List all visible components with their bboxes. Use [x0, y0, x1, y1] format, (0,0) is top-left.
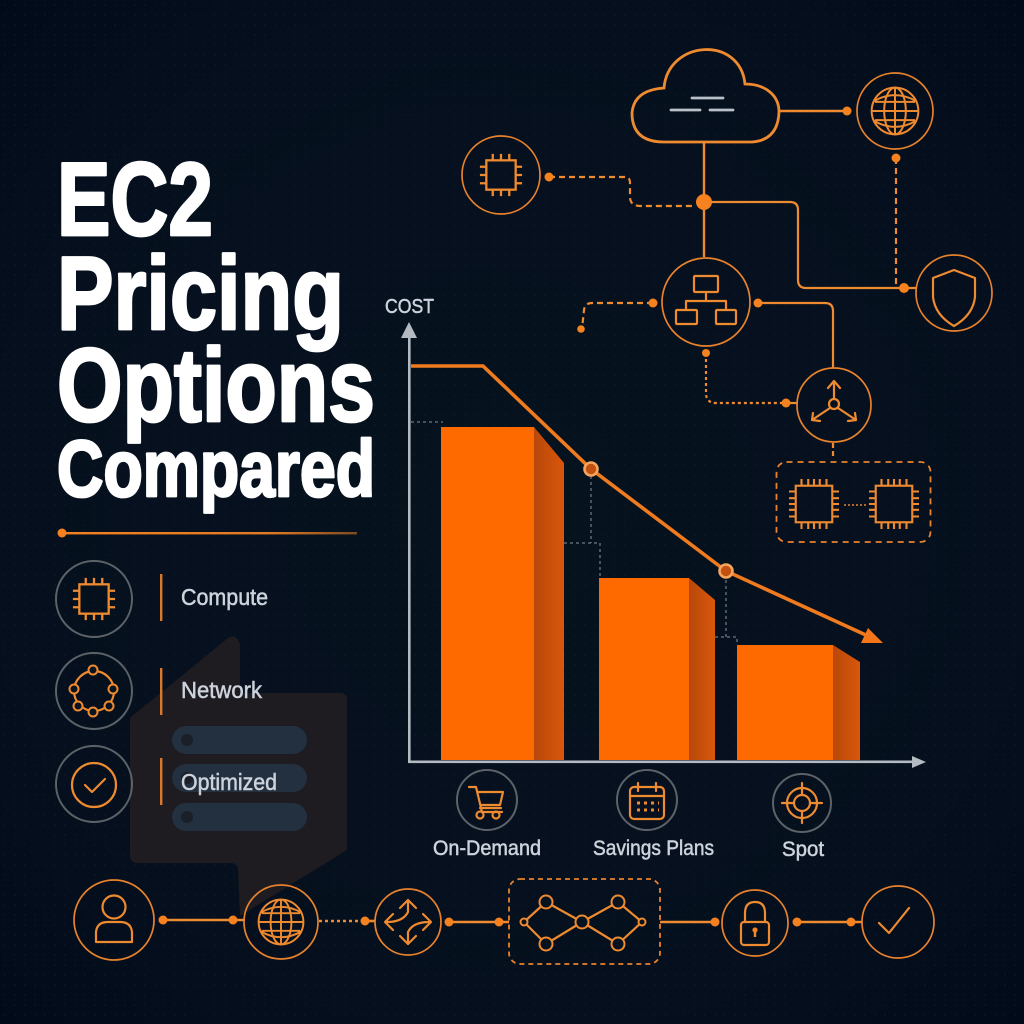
- title: [57, 142, 375, 513]
- title divider: [58, 528, 357, 538]
- pricing option: on-demand: [433, 770, 541, 860]
- pricing option: savings plans: Savings Plans: [593, 837, 714, 860]
- connectors: [549, 111, 916, 459]
- chart axes: [401, 322, 926, 768]
- legend: compute: [56, 561, 268, 637]
- icon: cloud: [632, 50, 779, 142]
- pricing option: savings plans: [593, 770, 714, 860]
- bar: on-demand: [441, 427, 564, 760]
- guide lines: [411, 422, 737, 645]
- bar: spot: [737, 645, 860, 760]
- flow connectors: [163, 920, 862, 922]
- icon: flow globe: [244, 885, 318, 959]
- title: EC2: [57, 142, 213, 258]
- dashed network group: [509, 879, 660, 964]
- background translucent document shape: [130, 636, 347, 916]
- legend: optimized: [56, 746, 277, 822]
- icon: distribute arrows: [797, 368, 871, 442]
- icon: lock: [722, 890, 788, 956]
- legend: compute: Compute: [181, 584, 268, 610]
- legend: network: [56, 653, 262, 729]
- connector nodes: [544, 106, 909, 408]
- cost trend line: [411, 366, 883, 643]
- pricing option: on-demand: On-Demand: [433, 837, 541, 860]
- bar: savings plans: [599, 578, 715, 760]
- title: Options: [57, 328, 375, 444]
- legend: optimized: Optimized: [181, 769, 277, 795]
- request flow row: [74, 879, 934, 964]
- icon: check: [862, 886, 934, 958]
- pricing option: spot: Spot: [782, 838, 824, 861]
- icon: globe: [857, 73, 933, 149]
- icon: routing arrows: [375, 889, 441, 955]
- icon: hierarchy: [662, 258, 750, 346]
- title: Compared: [57, 424, 375, 513]
- pricing option: spot: [773, 774, 831, 861]
- chip cluster: [776, 462, 930, 542]
- icon: shield: [916, 255, 992, 331]
- title: Pricing: [57, 236, 344, 352]
- network diagram: [462, 50, 992, 542]
- legend: network: Network: [181, 677, 262, 703]
- y axis label: COST: [385, 296, 434, 318]
- icon: user: [74, 880, 154, 960]
- cost chart: [385, 296, 926, 768]
- icon: compute chip: [462, 136, 540, 214]
